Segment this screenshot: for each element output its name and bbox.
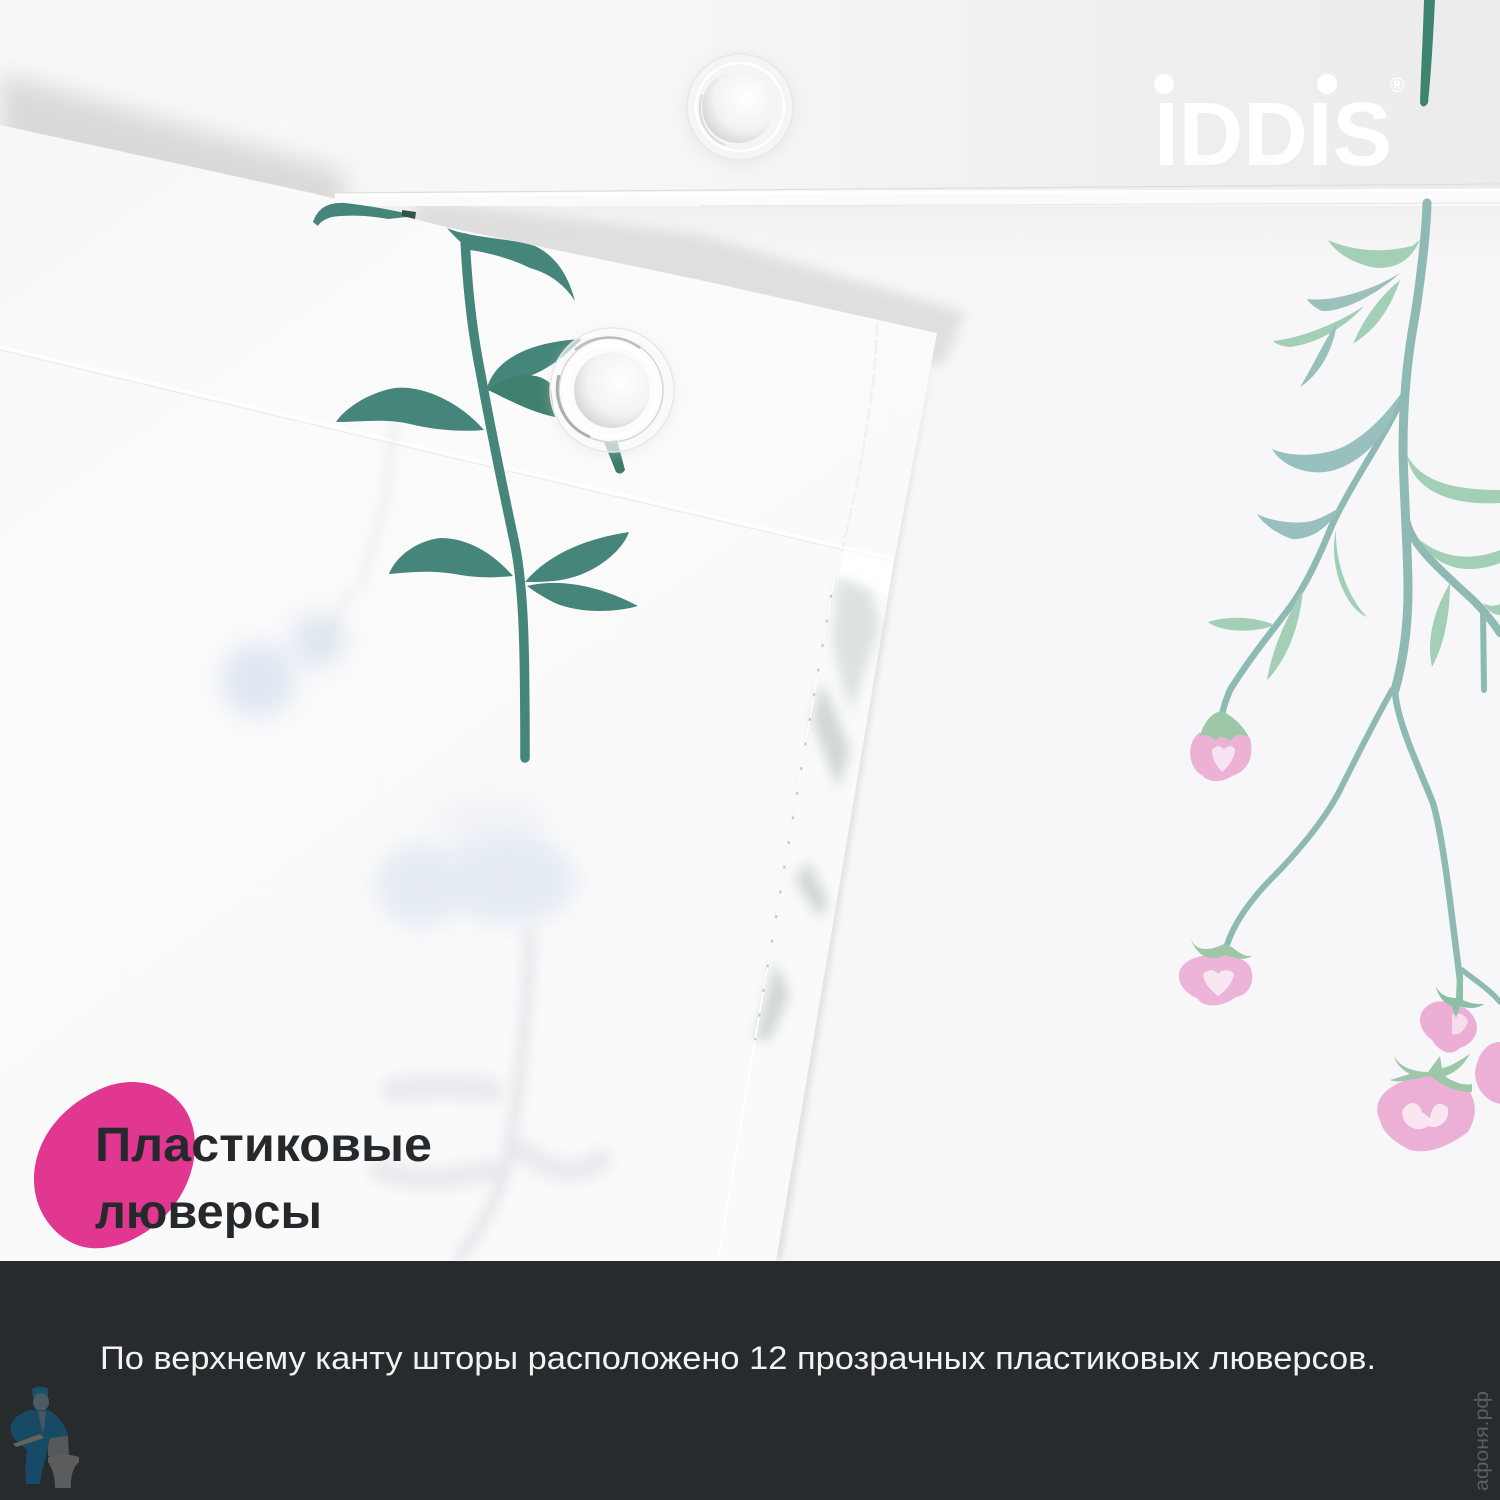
tail below grommet (604, 440, 625, 474)
top-right leaf (447, 228, 575, 301)
bud 2 (1179, 936, 1253, 1005)
folded curtain flap (0, 125, 937, 1261)
dark floral print on flap (313, 203, 638, 758)
heading (95, 1119, 432, 1239)
logo: IDDIS: IDDIS (1154, 85, 1392, 185)
show-through ghost print (220, 420, 880, 1258)
footer description text: По верхнему канту шторы расположено 12 прозрачных пластиковых люверсов. (100, 1340, 1376, 1376)
front grommet (549, 328, 675, 456)
heading: Пластиковые (95, 1119, 432, 1172)
bottom right leaf (527, 583, 638, 611)
hem shadow behind seam (755, 578, 880, 1040)
bud 3 (1420, 975, 1484, 1053)
dark footer band (0, 1261, 1500, 1500)
watermark: афоня.рф (1472, 1391, 1493, 1491)
main stem (465, 238, 525, 758)
ghost flower 2 (374, 794, 578, 929)
leaves (1208, 240, 1500, 680)
right floral print (1208, 203, 1500, 1002)
lower right leaf (525, 532, 629, 582)
lower left leaf (389, 538, 513, 577)
heading: люверсы (95, 1186, 322, 1239)
stems (1222, 203, 1500, 1002)
top stem fragment (1420, 0, 1435, 106)
logo: IDDIS: ® (1390, 75, 1405, 97)
bud 4 (1377, 1054, 1475, 1151)
buds (1179, 711, 1500, 1151)
top-left leaf (313, 203, 416, 226)
bud 5 (1475, 1042, 1500, 1104)
ghost leaves and stems (320, 420, 600, 1258)
hidden fragment at fold (402, 210, 416, 219)
folded flap shadow (770, 333, 938, 1260)
second right leaf (488, 375, 555, 417)
ghost flower 1 (220, 612, 346, 718)
top hem of curtain (335, 184, 1500, 206)
bud 1 (1190, 711, 1251, 781)
left leaf (336, 388, 484, 431)
hem seam (0, 347, 893, 558)
side stitching (719, 323, 877, 1255)
icon: plumber mascot with toilet (11, 1386, 79, 1488)
pink accent blob (34, 1082, 195, 1248)
upper right leaf (486, 339, 582, 392)
back grommet (684, 54, 796, 166)
